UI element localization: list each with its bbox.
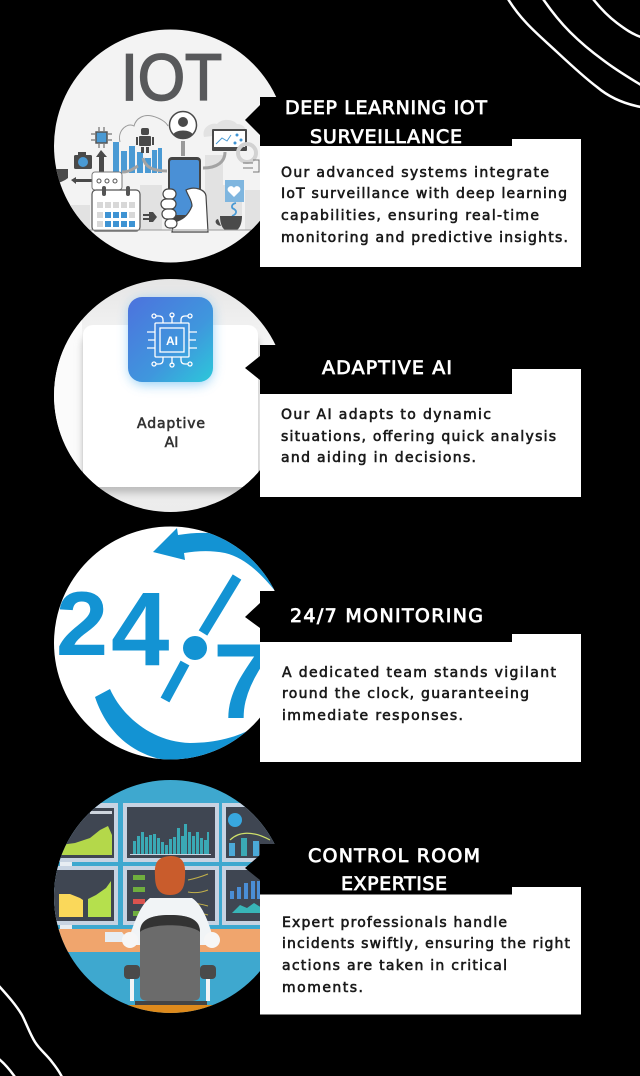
icon: coffee cup: [216, 216, 242, 230]
icon: pipes: [122, 152, 225, 172]
icon: AI chip: [147, 313, 197, 367]
body text: monitoring and predictive insights.: [281, 230, 568, 246]
chart: blue bars: [230, 881, 260, 899]
card label: [136, 416, 205, 448]
body text: A dedicated team stands vigilant: [282, 665, 556, 681]
armrests: [124, 965, 216, 979]
chair supports: [130, 979, 210, 1001]
monitor stands: [60, 862, 72, 929]
icon: connector: [243, 160, 259, 172]
heading: EXPERTISE: [341, 873, 447, 895]
illustration: IoT circle: [50, 26, 290, 266]
icon: chat box: [92, 172, 122, 190]
icon: chip: [91, 127, 112, 148]
desk: [50, 929, 290, 952]
number 4: 4: [111, 571, 169, 688]
chair: [124, 915, 216, 1005]
body text: round the clock, guaranteeing: [282, 686, 529, 702]
card label: AI: [165, 435, 178, 451]
body text: situations, offering quick analysis: [281, 429, 556, 445]
body text: [282, 665, 556, 724]
shirt: [127, 898, 215, 950]
icon: left arrow: [71, 177, 92, 184]
body text: [281, 165, 568, 246]
clock hands: [165, 577, 237, 700]
chart: green columns: [88, 881, 111, 917]
number 7: 7: [213, 621, 273, 741]
chart: pie: [228, 813, 242, 827]
body text: IoT surveillance with deep learning: [281, 186, 567, 202]
icon: smartphone and hand: [161, 157, 208, 232]
panel: 24/7 monitoring: [245, 591, 581, 762]
black flag: [245, 844, 512, 894]
heading: [308, 845, 480, 895]
body text: Expert professionals handle: [282, 915, 507, 931]
icon: monitor chart: [212, 129, 247, 151]
body text: and aiding in decisions.: [281, 450, 476, 466]
keyboard: [105, 932, 125, 942]
panel: adaptive AI: [245, 345, 581, 497]
heading: [285, 97, 487, 148]
icon glow: [130, 300, 212, 384]
icon: camera: [74, 152, 92, 169]
body text: immediate responses.: [282, 708, 463, 724]
body text: [282, 915, 570, 996]
card shadow: [83, 335, 258, 493]
heading: 24/7 MONITORING: [290, 605, 483, 627]
icon: heart badge: [225, 180, 244, 202]
black flag: [245, 97, 512, 146]
panel: deep learning IoT surveillance: [245, 97, 581, 267]
body text: capabilities, ensuring real-time: [281, 208, 539, 224]
black flag: [245, 345, 512, 394]
icon: calendar: [92, 186, 140, 231]
icon: user avatar: [170, 112, 196, 156]
icon: plug: [143, 212, 157, 222]
icon: partial device: [56, 169, 68, 182]
decorative curves bottom left: [0, 986, 62, 1076]
top arrow: [153, 528, 276, 592]
white card: [83, 325, 258, 487]
icon chip label: AI: [166, 334, 178, 348]
chair base: [135, 1001, 207, 1005]
icon: up arrow: [96, 150, 107, 172]
panel: control room expertise: [245, 844, 581, 1014]
IOT wordmark: IOT: [121, 40, 222, 114]
black flag: [245, 591, 512, 642]
heading: ADAPTIVE AI: [322, 357, 452, 379]
chart: green area: [60, 826, 112, 855]
body text: moments.: [282, 980, 363, 996]
body text: incidents swiftly, ensuring the right: [282, 936, 570, 952]
monitor wall: [40, 803, 282, 925]
heading: SURVEILLANCE: [310, 126, 462, 148]
icon: gear: [238, 144, 256, 162]
chart: teal bars: [133, 824, 209, 854]
number 2: 2: [56, 574, 108, 675]
icon: cloud outline: [119, 115, 168, 142]
illustration: Adaptive AI circle: [54, 279, 276, 512]
floor strip: [50, 1005, 290, 1017]
white text box: [260, 369, 581, 497]
card label: Adaptive: [137, 416, 205, 432]
hands: [122, 932, 220, 948]
body text: Our AI adapts to dynamic: [281, 407, 491, 423]
icon: robot: [136, 128, 154, 153]
body text: actions are taken in critical: [282, 958, 507, 974]
decorative ground: [90, 230, 252, 231]
hair: [155, 856, 185, 895]
clock centre: [183, 636, 207, 660]
white text box: [260, 139, 581, 267]
bottom arc: [95, 689, 270, 761]
icon: blue AI chip tile: [128, 297, 213, 382]
body text: Our advanced systems integrate: [281, 165, 549, 181]
heading: CONTROL ROOM: [308, 845, 480, 867]
illustration: 24/7 circle: [54, 526, 275, 760]
white text box: [260, 634, 581, 762]
chart: yellow area: [59, 894, 83, 917]
white text box: [260, 887, 581, 1014]
chart: labelled lines: [133, 874, 208, 916]
decorative curves top right: [508, 0, 640, 107]
person: [122, 856, 220, 950]
heading: DEEP LEARNING IOT: [285, 97, 487, 119]
chart: line and columns: [229, 833, 270, 856]
chart: teal area: [232, 903, 262, 913]
body text: [281, 407, 556, 466]
chart: blue bars: [113, 142, 162, 173]
icon: steam: [232, 203, 236, 216]
icon: cloud right: [203, 120, 246, 137]
illustration: control room circle: [40, 776, 290, 1017]
icon: background buildings: [60, 155, 263, 230]
